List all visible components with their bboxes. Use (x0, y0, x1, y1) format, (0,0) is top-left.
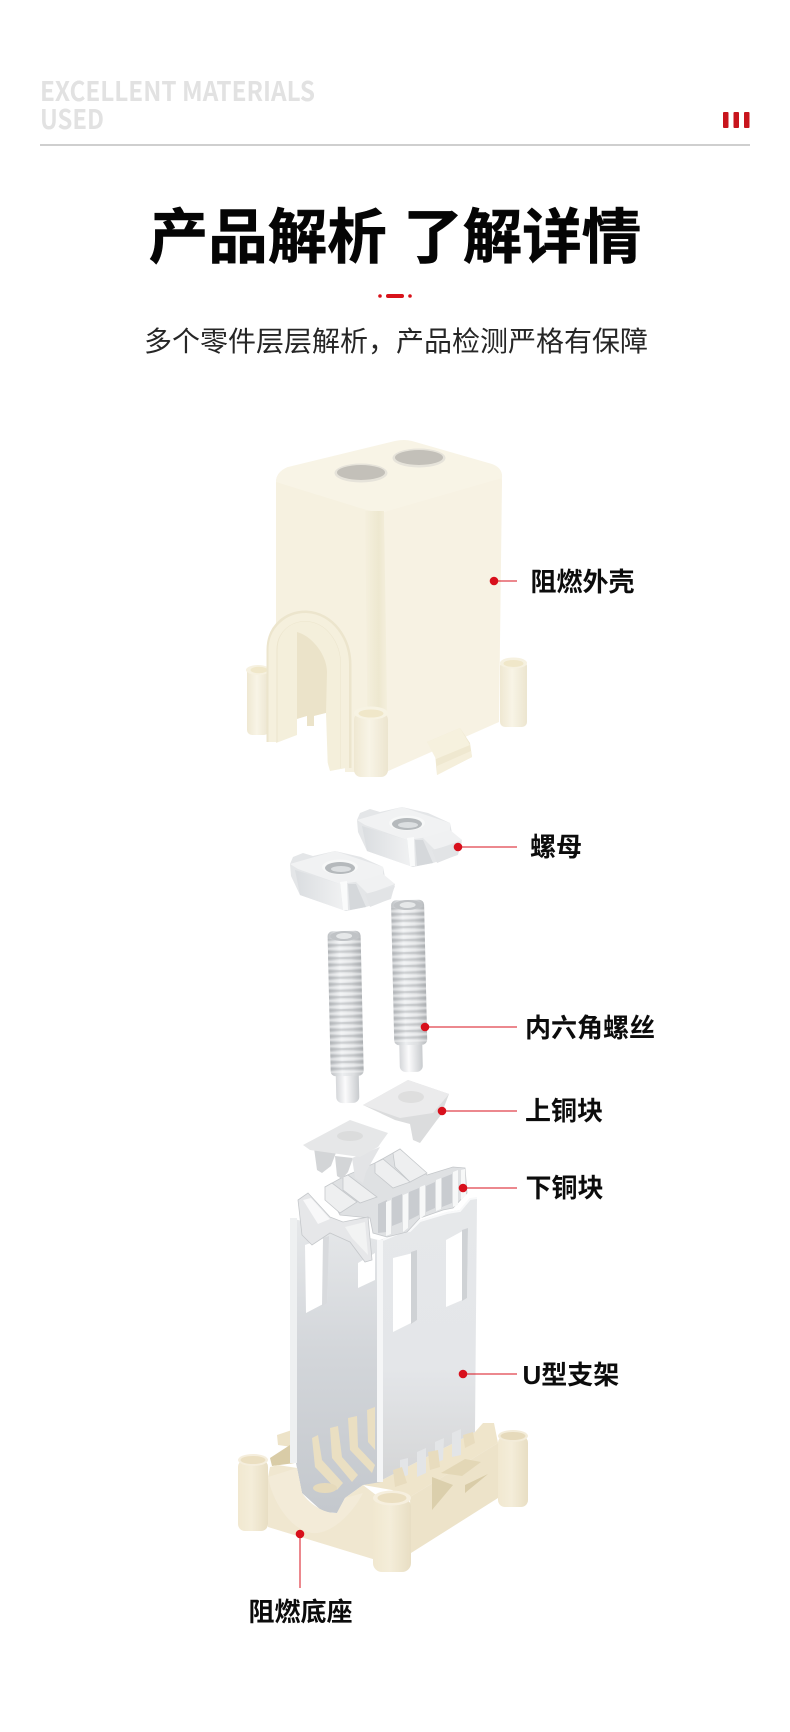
subtitle: 多个零件层层解析，产品检测严格有保障 (144, 326, 648, 357)
label: nut (454, 832, 582, 862)
cap window 2 (392, 448, 446, 468)
title red divider (378, 294, 412, 298)
shell left face (276, 467, 386, 772)
label: upper copper block: 上铜块 (525, 1096, 603, 1126)
screw left (328, 931, 364, 1103)
base front peg (373, 1490, 411, 1572)
part: U bracket (290, 1198, 477, 1513)
label: base: 阻燃底座 (248, 1597, 353, 1627)
part: flame-retardant shell (246, 440, 527, 777)
notch band (268, 1468, 363, 1533)
label: upper copper block (438, 1096, 603, 1126)
part: upper copper block left (303, 1120, 388, 1183)
base right face (410, 1443, 498, 1553)
header: english tagline: USED (40, 98, 104, 137)
part: base rear (238, 1423, 528, 1531)
left peg (246, 665, 270, 735)
bracket right face (378, 1198, 477, 1482)
comb gaps (378, 1174, 452, 1233)
screw right (391, 900, 428, 1072)
shell right face (384, 472, 502, 772)
arch opening (272, 616, 346, 772)
cap window 1 (334, 464, 388, 482)
bracket lower slots left (312, 1407, 375, 1490)
part: nuts (290, 807, 462, 911)
label: hex screw (421, 1013, 655, 1043)
right peg (500, 658, 527, 727)
label: U bracket (459, 1360, 619, 1390)
label: lower copper block: 下铜块 (526, 1173, 604, 1203)
label: hex screw: 内六角螺丝 (525, 1013, 655, 1043)
label: shell: 阻燃外壳 (530, 567, 635, 597)
clip tab (427, 728, 472, 775)
base front face (268, 1465, 376, 1560)
base left peg (238, 1454, 268, 1531)
nut rear (357, 807, 462, 867)
nut front (290, 851, 395, 911)
main title: 产品解析 了解详情 (149, 204, 641, 271)
front peg (354, 706, 388, 777)
header: red bars icon (723, 112, 750, 128)
corner shading (365, 511, 388, 770)
label: lower copper block (459, 1173, 604, 1203)
base right peg (498, 1430, 528, 1507)
comb teeth (386, 1169, 466, 1236)
comb body (325, 1149, 467, 1237)
part: set screws (328, 900, 428, 1103)
shell top face (276, 440, 502, 512)
part: upper copper block right (363, 1080, 449, 1143)
label: nut: 螺母 (530, 832, 582, 862)
part: base front (268, 1443, 498, 1572)
ridges (325, 1149, 427, 1213)
part: lower copper block (298, 1149, 467, 1262)
bracket left face (290, 1218, 381, 1513)
bracket lower prongs right (393, 1429, 475, 1487)
header: english tagline: EXCELLENT MATERIALS (40, 70, 315, 109)
header: english tagline (40, 70, 315, 137)
label: U bracket: U型支架 (522, 1360, 619, 1390)
label: base (248, 1530, 353, 1627)
saddle front (298, 1193, 372, 1262)
